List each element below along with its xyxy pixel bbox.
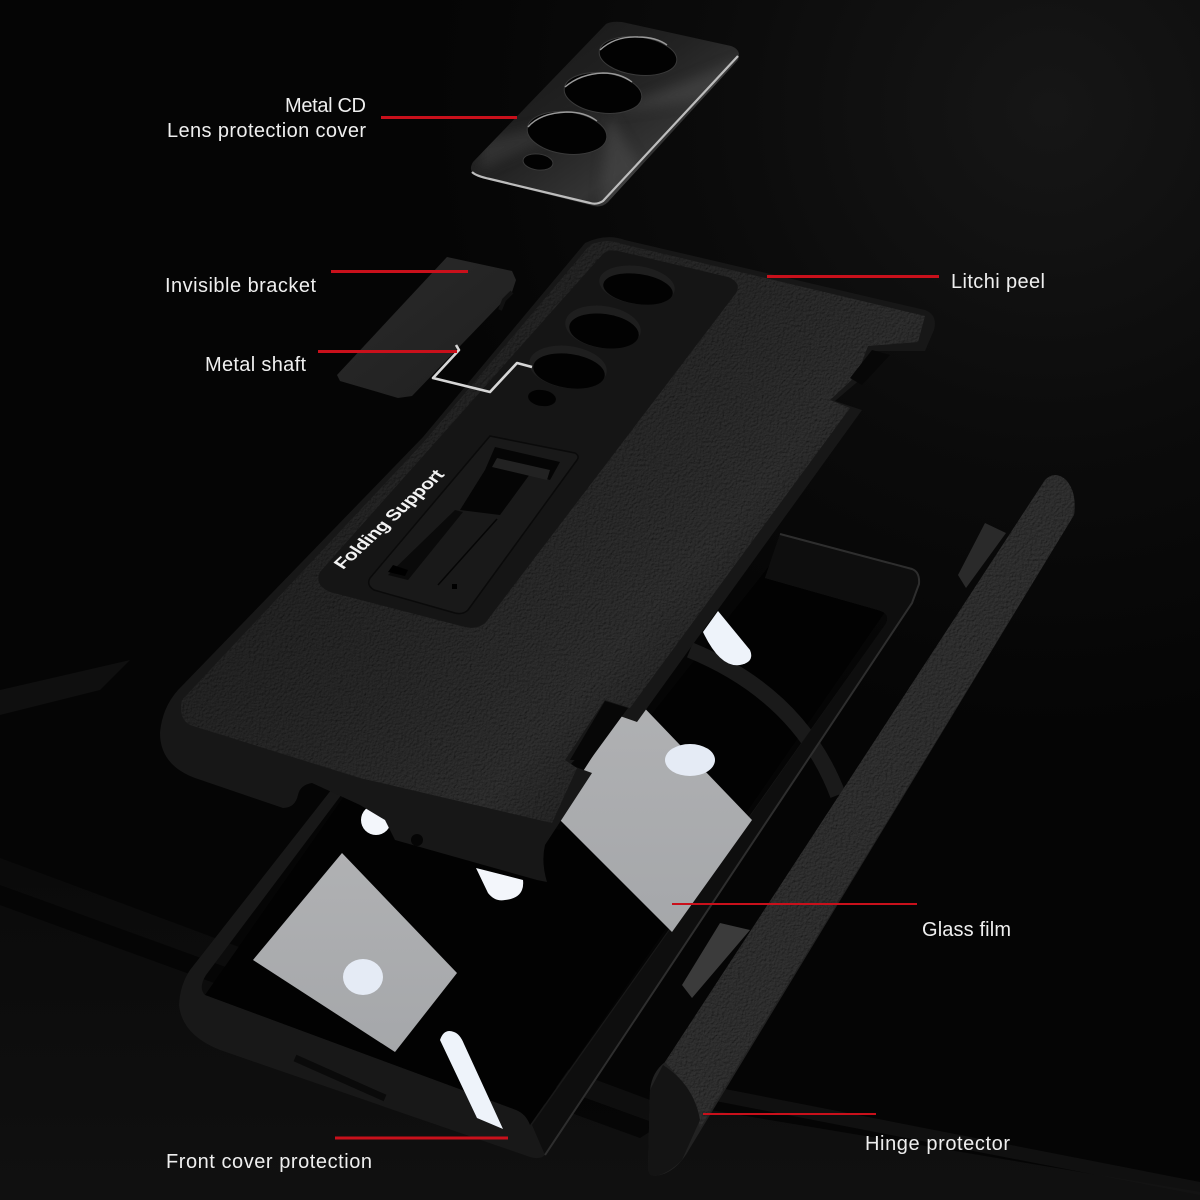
label: glass film: Glass film	[922, 919, 1011, 941]
metal shaft	[433, 345, 532, 392]
film dot lower	[343, 959, 383, 995]
white tab: middle	[476, 868, 523, 900]
camera holes	[526, 261, 677, 408]
label: metal cd lens cover	[167, 95, 366, 142]
invisible bracket	[337, 257, 516, 398]
label: metal cd lens cover: Lens protection cover	[167, 120, 366, 142]
white tab: left	[361, 805, 391, 835]
front cover interior	[205, 565, 885, 1125]
callout lines	[318, 118, 939, 1138]
folding stand	[369, 436, 578, 614]
lens protection cover	[471, 22, 740, 210]
main case	[160, 237, 935, 882]
lens rim highlights	[528, 37, 667, 127]
white tab: upper	[703, 611, 751, 665]
folding support text: Folding Support	[329, 466, 448, 572]
upper glass film visible part	[555, 695, 752, 932]
lens holes	[522, 32, 679, 172]
film dot upper	[665, 744, 715, 776]
magnetic ring	[690, 650, 838, 795]
white tab: bottom	[440, 1031, 503, 1129]
label: hinge protector: Hinge protector	[865, 1133, 1010, 1155]
front cover frame	[179, 534, 919, 1158]
label: front cover protection: Front cover protection	[166, 1151, 372, 1173]
label: metal cd lens cover: Metal CD	[285, 95, 366, 117]
hinge clip lower	[682, 923, 750, 998]
charging port hole	[411, 834, 423, 846]
side notches	[570, 350, 890, 760]
leather panel	[181, 241, 925, 823]
hinge protector	[648, 475, 1075, 1176]
frame outer edge highlight	[545, 534, 919, 1155]
back plate	[318, 250, 738, 628]
label: litchi peel: Litchi peel	[951, 271, 1045, 293]
glass film lower	[253, 853, 457, 1052]
hinge clip upper	[958, 523, 1006, 588]
label: invisible bracket: Invisible bracket	[165, 275, 316, 297]
frame top band and right rail	[532, 534, 919, 1155]
label: metal shaft: Metal shaft	[205, 354, 306, 376]
bottom button slot	[295, 1058, 385, 1098]
